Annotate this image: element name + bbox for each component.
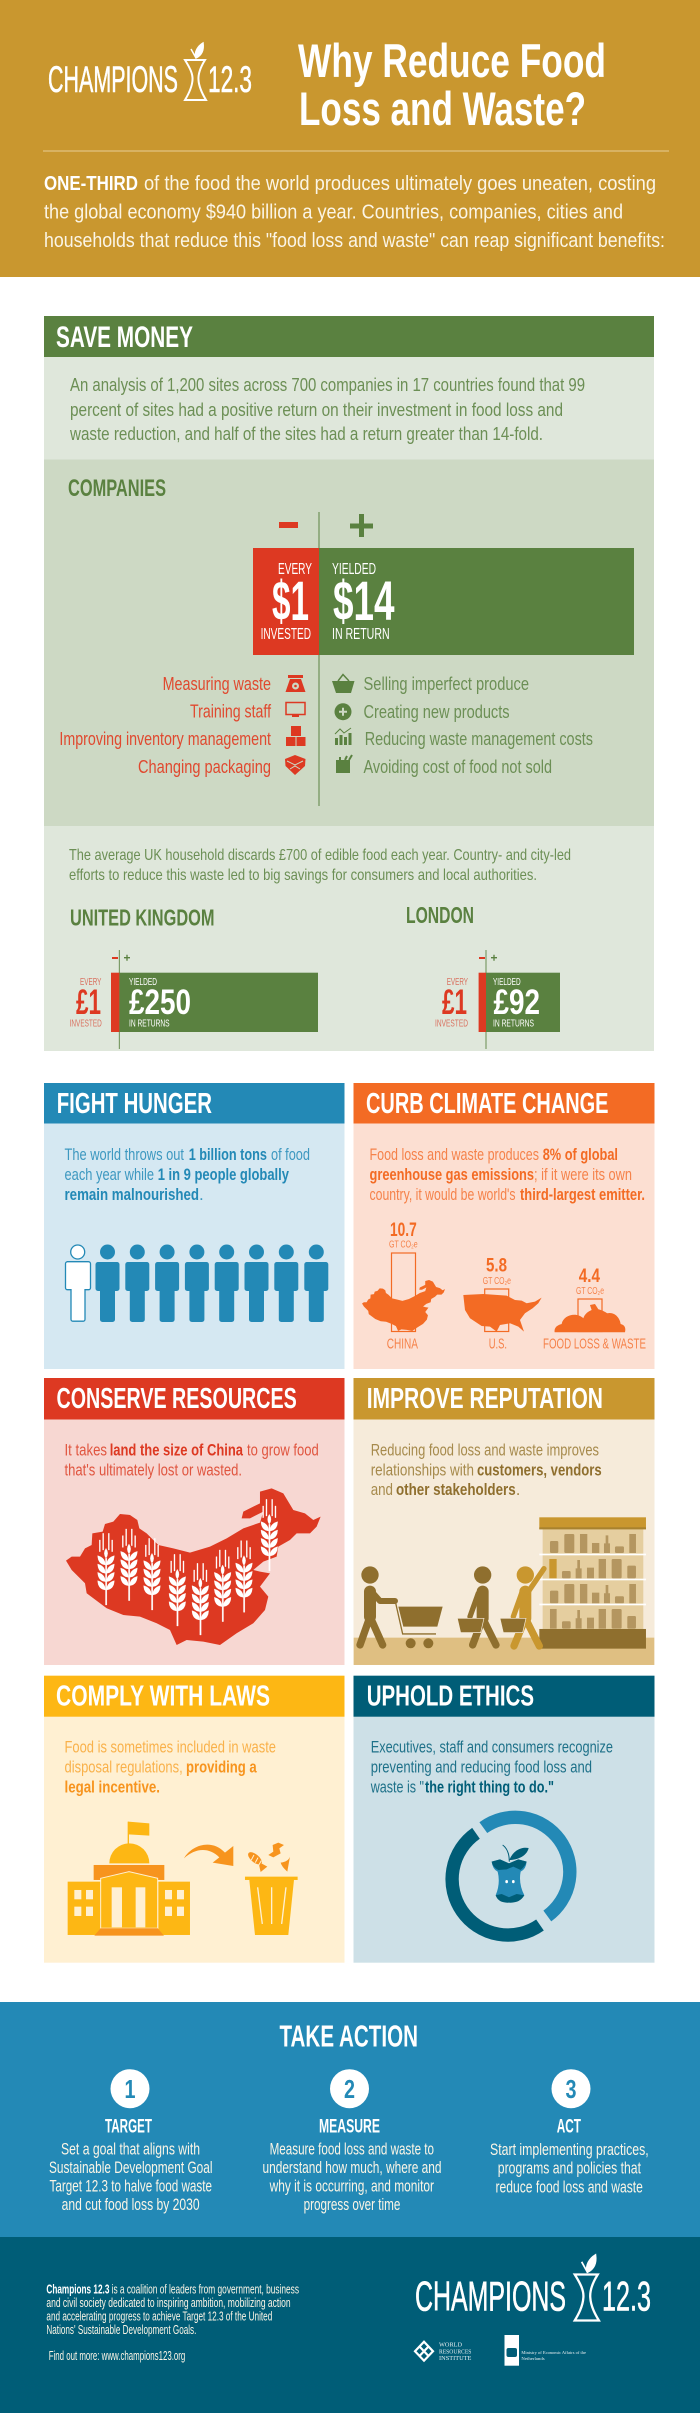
logo: World Resources Institute: RESOURCES — [439, 2349, 471, 2355]
apple core — [492, 1845, 529, 1903]
text: about Champions 12.3 — [46, 2282, 299, 2363]
text: fight hunger: 1 billion tons — [189, 1145, 267, 1164]
logo: Champions 12.3 footer: 12.3 — [602, 2273, 651, 2320]
panel: conserve resources — [44, 1378, 344, 1665]
text: laws: providing a — [186, 1757, 257, 1776]
text: about Champions 12.3: Find out more: www.champions123.org — [49, 2349, 185, 2363]
intro text: the global economy $940 billion a year. Countries, companies, cities and — [44, 200, 623, 224]
panel: fight hunger — [44, 1083, 344, 1369]
step 3: act: programs and policies that — [498, 2160, 641, 2178]
footer — [0, 2237, 700, 2413]
intro text: ONE-THIRD — [44, 172, 138, 195]
text: analysis: waste reduction, and half of the sites had a return greater than 14-fold. — [69, 424, 543, 444]
chart: food loss and waste emissions: 4.4 — [579, 1266, 600, 1287]
arrow — [184, 1845, 233, 1866]
chart: London returns: INVESTED — [435, 1018, 468, 1030]
chart: London returns: IN RETURNS — [493, 1018, 534, 1030]
chart: U.S. emissions: 5.8 — [486, 1256, 507, 1277]
logo: World Resources Institute — [415, 2342, 472, 2362]
text: about Champions 12.3: and civil society dedicated to inspiring ambition, mobilizing action — [46, 2296, 291, 2310]
text: climate: third-largest emitter. — [520, 1185, 645, 1204]
section: take action — [0, 2002, 700, 2237]
list: costs: Measuring waste — [163, 673, 271, 694]
list: benefits: Avoiding cost of food not sold — [364, 756, 552, 777]
chart: United Kingdom returns: INVESTED — [70, 1018, 102, 1030]
step 1: target — [49, 2069, 212, 2214]
text: fight hunger: 1 in 9 people globally — [158, 1165, 289, 1184]
text: climate: Food loss and waste produces — [370, 1145, 539, 1164]
chart: London returns: YIELDED — [493, 976, 521, 988]
icon: trash bin with food scraps — [245, 1843, 298, 1935]
text: UK household — [69, 847, 571, 884]
icon: plus circle — [334, 703, 352, 720]
step 3: act: ACT — [557, 2116, 581, 2137]
chart: China emissions: 10.7 — [390, 1220, 417, 1241]
bar: yielded — [319, 548, 634, 655]
step 2: measure: why it is occurring, and monitor — [269, 2178, 434, 2196]
bar: invested: $1 — [272, 569, 309, 632]
list: benefits: Creating new products — [364, 701, 510, 722]
chart: United Kingdom returns: EVERY — [80, 976, 101, 988]
chart: London returns — [435, 950, 560, 1049]
panel: save money — [44, 316, 654, 1051]
text: analysis: An analysis of 1,200 sites across 700 companies in 17 countries found that 99 — [70, 375, 585, 395]
text: conserve: to grow food — [247, 1441, 319, 1460]
chart: United Kingdom returns: IN RETURNS — [129, 1018, 170, 1030]
chart: food loss and waste emissions — [543, 1266, 646, 1352]
chart: United Kingdom returns: YIELDED — [129, 976, 157, 988]
text: conserve: that's ultimately lost or wasted. — [64, 1461, 242, 1480]
text: laws: legal incentive. — [64, 1777, 160, 1796]
heading: comply with laws: COMPLY WITH LAWS — [56, 1681, 270, 1713]
chart: U.S. emissions: GT CO₂e — [483, 1276, 511, 1287]
icon: open box — [285, 755, 306, 775]
step 2: measure — [262, 2069, 442, 2214]
text: about Champions 12.3: Nations' Sustainable Development Goals. — [46, 2323, 196, 2337]
shopper reaching for shelf — [500, 1566, 544, 1646]
icon: minus — [279, 522, 298, 528]
logo: World Resources Institute: INSTITUTE — [439, 2356, 472, 2362]
chart: food loss and waste emissions: FOOD LOSS & WASTE — [543, 1336, 646, 1352]
text: climate — [370, 1145, 645, 1204]
text: fight hunger: of food — [271, 1145, 310, 1164]
text: fight hunger: remain malnourished — [64, 1185, 199, 1204]
logo: Ministry of Economic Affairs: Ministry of Economic Affairs of the — [521, 2350, 586, 2355]
heading: United Kingdom: UNITED KINGDOM — [70, 905, 214, 931]
step 1: target: Sustainable Development Goal — [49, 2159, 212, 2177]
title — [298, 34, 606, 135]
chart: U.S. emissions: U.S. — [489, 1336, 507, 1352]
icon: recycling ring with apple core — [452, 1817, 570, 1935]
heading: London: LONDON — [406, 902, 474, 928]
list: benefits: Selling imperfect produce — [364, 673, 529, 694]
logo: Ministry of Economic Affairs: Netherlands — [521, 2356, 545, 2361]
text: ethics: Executives, staff and consumers recognize — [371, 1737, 613, 1756]
icon row: nine people — [66, 1244, 328, 1322]
logo: Champions 12.3 — [48, 43, 252, 100]
chart: United Kingdom returns — [70, 950, 318, 1049]
heading: companies: COMPANIES — [68, 475, 166, 502]
text: reputation: relationships with — [371, 1461, 474, 1480]
text: laws: disposal regulations, — [64, 1757, 183, 1776]
text: ethics — [370, 1737, 613, 1796]
text: reputation: and — [371, 1480, 393, 1499]
heading: take action: TAKE ACTION — [280, 2019, 418, 2054]
illustration: government building to trash bin — [68, 1822, 298, 1936]
chart: London returns: EVERY — [447, 976, 468, 988]
chart: London returns: £1 — [442, 983, 467, 1022]
panel: improve reputation — [354, 1378, 654, 1665]
text: climate: country, it would be world's — [370, 1185, 516, 1204]
logo: Champions 12.3: 12.3 — [208, 59, 252, 100]
title: Loss and Waste? — [299, 82, 586, 135]
text: ethics: preventing and reducing food loss and — [371, 1757, 592, 1776]
header banner — [0, 0, 700, 277]
icon: plus — [350, 514, 373, 537]
panel: curb climate change — [354, 1083, 654, 1369]
bar: yielded: YIELDED — [332, 561, 376, 578]
icon: boxes — [286, 726, 306, 746]
heading: fight hunger: FIGHT HUNGER — [57, 1088, 212, 1120]
logo: Champions 12.3: CHAMPIONS — [48, 59, 178, 100]
text: ethics: waste is " — [370, 1777, 424, 1796]
chart: United Kingdom returns: £250 — [129, 983, 191, 1022]
step 3: act: Start implementing practices, — [490, 2141, 649, 2159]
bar: yielded: $14 — [333, 569, 394, 632]
step 2: measure: understand how much, where and — [262, 2159, 442, 2177]
text: conserve: land the size of China — [110, 1441, 243, 1460]
heading: improve reputation: IMPROVE REPUTATION — [367, 1383, 603, 1415]
chart: U.S. emissions — [463, 1256, 542, 1352]
text: fight hunger — [64, 1145, 310, 1204]
panel: companies — [44, 460, 654, 826]
chart: China emissions: GT CO₂e — [389, 1240, 418, 1251]
text: laws — [64, 1737, 276, 1796]
list: costs: Improving inventory management — [59, 728, 271, 749]
text: fight hunger: . — [199, 1185, 204, 1204]
list: costs: Training staff — [190, 701, 272, 722]
shelf unit — [539, 1517, 646, 1649]
text: reputation: other stakeholders — [396, 1480, 516, 1499]
step 1: target: 1 — [124, 2074, 136, 2104]
heading: save money: SAVE MONEY — [56, 321, 193, 354]
text: about Champions 12.3: Champions 12.3 — [46, 2282, 109, 2296]
text: reputation: Reducing food loss and waste improves — [371, 1441, 599, 1460]
icon: scale — [286, 675, 306, 692]
text: about Champions 12.3: is a coalition of leaders from government, business — [112, 2282, 299, 2296]
step 1: target: and cut food loss by 2030 — [62, 2196, 200, 2214]
step 1: target: Target 12.3 to halve food waste — [50, 2178, 212, 2196]
text: reputation — [371, 1441, 602, 1499]
text: fight hunger: The world throws out — [64, 1145, 184, 1164]
text: conserve — [64, 1441, 319, 1480]
list: costs: Changing packaging — [138, 756, 271, 777]
step 2: measure: MEASURE — [319, 2116, 380, 2137]
illustration: shoppers and shelves — [354, 1517, 654, 1665]
text: ethics: the right thing to do." — [425, 1777, 554, 1796]
chart: China emissions — [362, 1220, 445, 1352]
chart: China emissions: CHINA — [387, 1336, 418, 1352]
icon: monitor — [286, 702, 305, 717]
icon: basket — [332, 674, 354, 693]
text: about Champions 12.3: and accelerating progress to achieve Target 12.3 of the United — [46, 2310, 272, 2324]
shopper with cart — [360, 1566, 443, 1648]
logo: Champions 12.3 footer — [415, 2255, 651, 2320]
step 2: measure: Measure food loss and waste to — [270, 2140, 434, 2158]
intro text — [44, 172, 665, 252]
text: conserve: It takes — [64, 1441, 107, 1460]
heading: conserve resources: CONSERVE RESOURCES — [56, 1383, 297, 1415]
text: analysis — [69, 375, 585, 444]
bar: invested — [253, 548, 319, 655]
step 3: act — [490, 2069, 649, 2196]
chart: food loss and waste emissions: GT CO₂e — [576, 1286, 604, 1297]
chart: United Kingdom returns: £1 — [76, 983, 101, 1022]
bar: yielded: IN RETURN — [332, 626, 390, 643]
list: costs — [59, 673, 272, 777]
chart: London returns: £92 — [494, 983, 540, 1022]
title: Why Reduce Food — [298, 34, 606, 87]
text: climate: ; if it were its own — [534, 1165, 632, 1184]
step 2: measure: progress over time — [304, 2196, 400, 2214]
text: climate: greenhouse gas emissions — [370, 1165, 534, 1184]
text: reputation: . — [516, 1480, 520, 1499]
bar: invested: EVERY — [278, 561, 312, 578]
text: UK household: efforts to reduce this waste led to big savings for consumers and local authorities. — [69, 867, 537, 884]
shopper with basket — [457, 1566, 496, 1645]
text: laws: Food is sometimes included in waste — [64, 1737, 276, 1756]
step 2: measure: 2 — [344, 2074, 355, 2104]
step 3: act: 3 — [566, 2074, 576, 2104]
logo: World Resources Institute: WORLD — [439, 2343, 463, 2349]
text: reputation: customers, vendors — [477, 1461, 602, 1480]
icon: chart — [335, 728, 352, 745]
bar: invested: INVESTED — [261, 626, 311, 643]
list: benefits — [364, 673, 593, 777]
icon: food bag — [336, 755, 352, 773]
map: China with wheat — [66, 1488, 321, 1645]
text: climate: 8% of global — [543, 1145, 618, 1164]
logo: Champions 12.3 footer: CHAMPIONS — [415, 2273, 566, 2320]
step 3: act: reduce food loss and waste — [496, 2178, 643, 2196]
icon: government building — [68, 1822, 190, 1936]
panel: comply with laws — [44, 1676, 344, 1963]
heading: uphold ethics: UPHOLD ETHICS — [367, 1681, 534, 1713]
logo: Ministry of Economic Affairs — [504, 2335, 586, 2366]
step 1: target: TARGET — [105, 2116, 152, 2137]
text: fight hunger: each year while — [64, 1165, 154, 1184]
text: analysis: percent of sites had a positive return on their investment in food loss and — [70, 400, 563, 420]
text: UK household: The average UK household discards £700 of edible food each year. Country- and city-led — [69, 847, 571, 864]
step 1: target: Set a goal that aligns with — [61, 2140, 200, 2158]
panel: uphold ethics — [354, 1676, 654, 1963]
list: benefits: Reducing waste management costs — [365, 728, 593, 749]
